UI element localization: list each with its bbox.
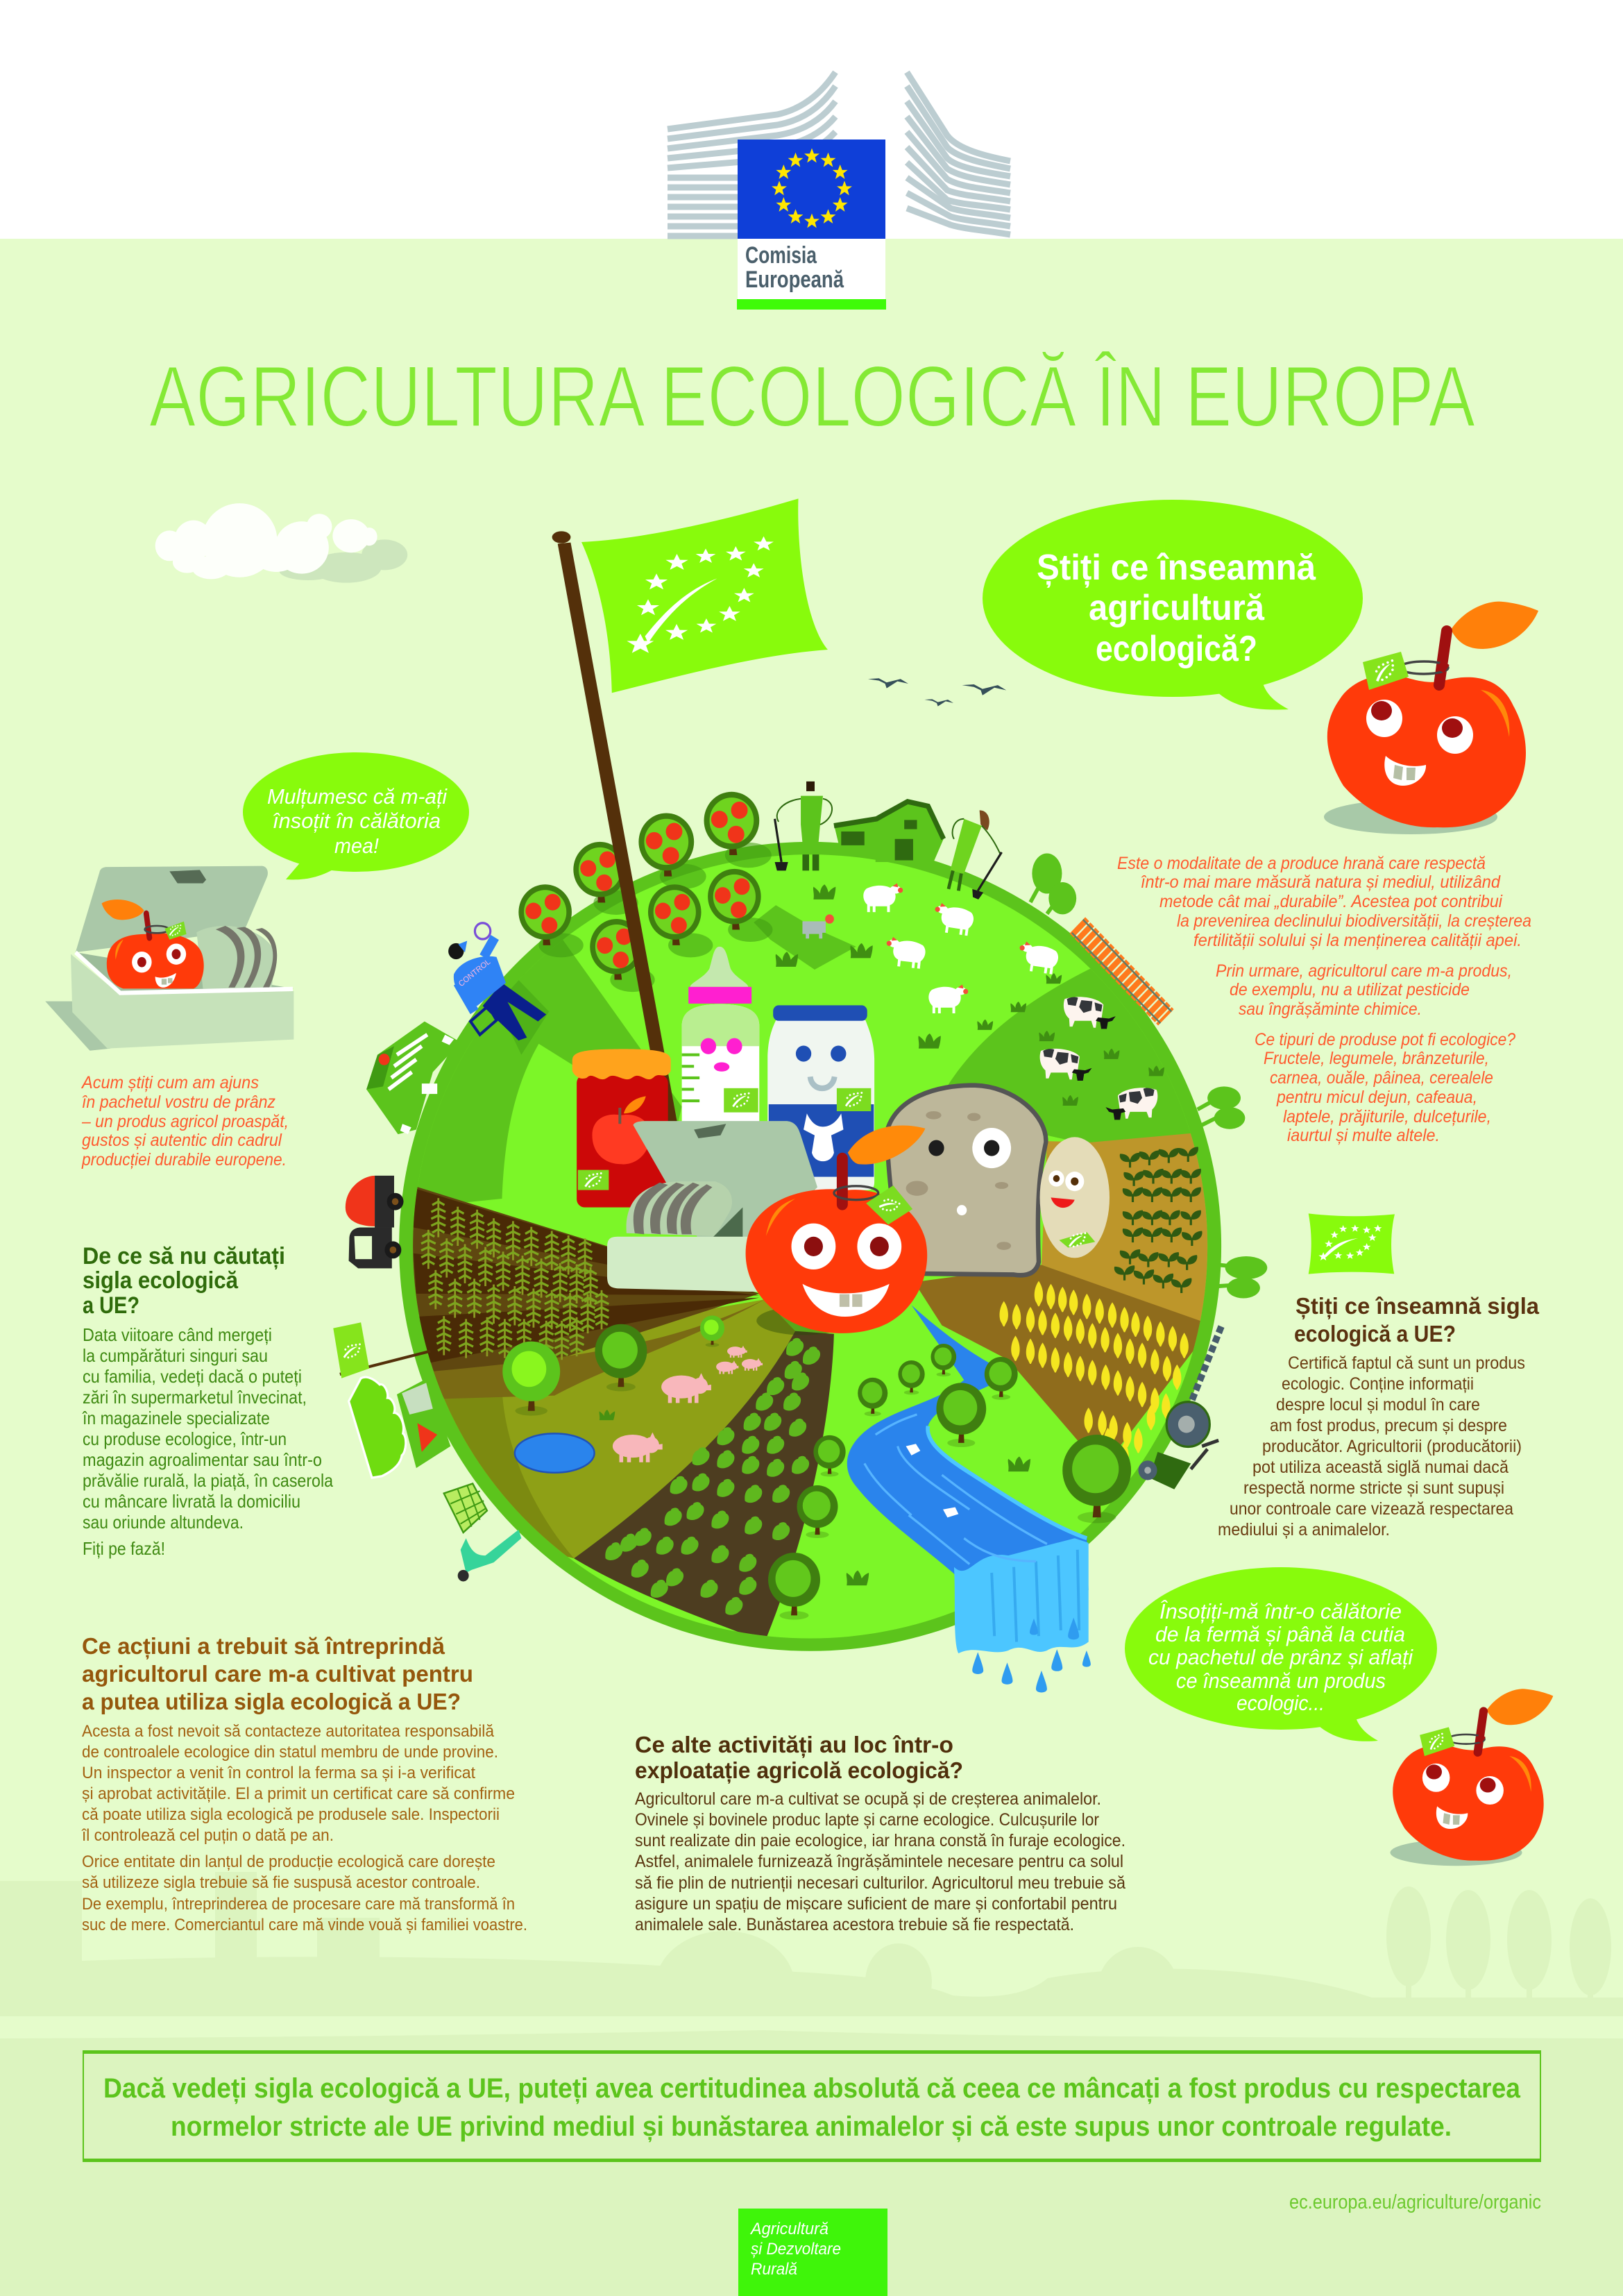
sheep flock bbox=[802, 884, 1060, 1013]
text block: what the logo means: mediului și a animalelor. bbox=[1218, 1520, 1390, 1539]
text block: look for the logo: prăvălie rurală, la piață, în caserola bbox=[83, 1470, 333, 1491]
illustration: left cloud and lunchbox bbox=[45, 503, 407, 1051]
text block: how you got to the lunchbox bbox=[80, 1073, 289, 1170]
footer green label: Agricultură bbox=[749, 2220, 829, 2238]
text block: what the farmer had to do: suc de mere. Comerciantul care mă vinde vouă și familiei voastre. bbox=[82, 1916, 527, 1934]
text block: what the farmer had to do: agricultorul care m-a cultivat pentru bbox=[82, 1661, 473, 1687]
field: olive pig pasture bbox=[422, 1299, 795, 1558]
text block: look for the logo: sigla ecologică bbox=[83, 1267, 239, 1294]
field: dark brown earth with lettuce bbox=[574, 1331, 834, 1642]
organic logo stars bbox=[627, 537, 774, 653]
text block: what the logo means: despre locul și modul în care bbox=[1276, 1395, 1480, 1415]
barn bbox=[834, 802, 944, 862]
text block: look for the logo: magazin agroalimentar sau într-o bbox=[83, 1449, 322, 1470]
inspector with magnifying glass bbox=[448, 923, 546, 1040]
icon: lunchbox with apple bbox=[45, 866, 294, 1051]
speech bubble: join me: de la fermă și până la cutia bbox=[1155, 1622, 1405, 1646]
field: wheat bbox=[919, 1265, 1200, 1445]
text block: other farm activities: sunt realizate din paie ecologice, iar hrana constă în furaje ecologice. bbox=[635, 1831, 1125, 1850]
bread slices bbox=[196, 926, 277, 988]
field: upper left meadow shadow bbox=[418, 1013, 538, 1202]
lunchbox with bread bbox=[607, 1121, 817, 1292]
text block: how you got to the lunchbox: gustos și autentic din cadrul bbox=[82, 1131, 282, 1150]
text block: look for the logo bbox=[82, 1243, 333, 1559]
flag pole bbox=[558, 543, 677, 1124]
text block: other farm activities: Agricultorul care m-a cultivat se ocupă și de creșterea animalelor. bbox=[635, 1789, 1101, 1809]
potato character bbox=[1040, 1137, 1110, 1258]
green logo bar bbox=[737, 299, 886, 310]
speech bubble: join me: ce înseamnă un produs bbox=[1176, 1669, 1386, 1693]
text block: what it means: laptele, prăjiturile, dulcețurile, bbox=[1283, 1107, 1491, 1126]
text block: what the farmer had to do: să utilizeze sigla trebuie să fie suspusă acestor controale. bbox=[82, 1873, 480, 1892]
text block: what it means: Fructele, legumele, brânzeturile, bbox=[1264, 1049, 1489, 1068]
water drops bbox=[972, 1618, 1091, 1692]
text block: what the farmer had to do: Un inspector a venit în control la ferma sa și i-a verificat bbox=[82, 1764, 475, 1782]
text block: what the logo means: ecologic. Conține informații bbox=[1282, 1374, 1474, 1394]
logo text bbox=[745, 242, 844, 293]
text block: what it means: într-o mai mare măsură natura și mediul, utilizând bbox=[1141, 872, 1501, 892]
text block: look for the logo: cu mâncare livrată la domiciliu bbox=[83, 1491, 300, 1512]
speech bubble: join me: Însoțiți-mă într-o călătorie bbox=[1159, 1599, 1402, 1623]
grass tufts bbox=[600, 884, 1164, 1585]
speech bubble: what is organic farming: Știți ce înseamnă bbox=[1037, 548, 1316, 588]
text block: look for the logo: zări în supermarketul învecinat, bbox=[83, 1387, 307, 1408]
text block: other farm activities: asigure un spațiu de mișcare suficient de mare și confortabil pentru bbox=[635, 1894, 1117, 1914]
flag cloth bbox=[581, 498, 828, 693]
text block: other farm activities: Ovinele și bovinele produc lapte și carne ecologice. Culcușurile lor bbox=[635, 1810, 1099, 1830]
truck with apples bbox=[346, 1176, 404, 1268]
text block: what the farmer had to do: de controalele ecologice din statul membru de unde provine. bbox=[82, 1743, 498, 1762]
text block: look for the logo: cu familia, vedeți dacă o puteți bbox=[83, 1366, 302, 1387]
milk bottle bbox=[682, 947, 759, 1124]
text block: what the farmer had to do: Acesta a fost nevoit să contacteze autoritatea responsabilă bbox=[82, 1722, 495, 1741]
text block: what it means: la prevenirea declinului biodiversității, la creșterea bbox=[1177, 911, 1531, 931]
text block: look for the logo: Fiți pe fază! bbox=[83, 1538, 165, 1559]
text block: what it means: Ce tipuri de produse pot fi ecologice? bbox=[1255, 1030, 1515, 1049]
text block: other farm activities: exploatație agricolă ecologică? bbox=[635, 1757, 963, 1784]
text block: what the farmer had to do: și aprobat activitățile. El a primit un certificat care să confirme bbox=[82, 1784, 515, 1803]
text block: how you got to the lunchbox: producției durabile europene. bbox=[81, 1150, 287, 1170]
featured products bbox=[572, 947, 1110, 1335]
flag with organic logo bbox=[552, 498, 828, 1124]
text block: what it means: pentru micul dejun, cafeaua, bbox=[1276, 1088, 1477, 1107]
speech bubble: thanks: Mulțumesc că m-ați bbox=[267, 784, 448, 809]
text block: what it means bbox=[1117, 854, 1531, 1145]
birds bbox=[868, 678, 1006, 707]
text block: what the logo means: am fost produs, precum și despre bbox=[1270, 1416, 1507, 1435]
text block: look for the logo: în magazinele specializate bbox=[82, 1408, 270, 1428]
text block: what it means: de exemplu, nu a utilizat pesticide bbox=[1230, 980, 1470, 999]
text block: look for the logo: Data viitoare când mergeți bbox=[83, 1324, 272, 1345]
logo text: Europeană bbox=[745, 267, 844, 293]
text block: what the logo means: ecologică a UE? bbox=[1294, 1321, 1456, 1347]
text block: what the logo means: Știți ce înseamnă sigla bbox=[1295, 1293, 1540, 1319]
text block: what it means: iaurtul și multe altele. bbox=[1287, 1126, 1440, 1145]
website link: ec.europa.eu/agriculture/organic bbox=[1289, 2191, 1541, 2213]
text block: how you got to the lunchbox: Acum știți cum am ajuns bbox=[80, 1073, 259, 1092]
apple character top right bbox=[1324, 602, 1538, 834]
text block: what it means: fertilității solului și la menținerea calității apei. bbox=[1193, 931, 1522, 950]
tractor and plough bbox=[1138, 1326, 1221, 1489]
text block: what the farmer had to do: Orice entitate din lanțul de producție ecologică care dorește bbox=[82, 1852, 495, 1871]
speech bubble: what is organic farming: agricultură bbox=[1089, 588, 1265, 628]
organic logo right bbox=[1309, 1213, 1395, 1274]
text block: how you got to the lunchbox: în pachetul vostru de prânz bbox=[82, 1092, 275, 1112]
farmer man bbox=[775, 782, 832, 870]
text block: other farm activities: Astfel, animalele furnizează îngrășămintele necesare pentru ca solul bbox=[635, 1852, 1123, 1871]
pond bbox=[515, 1433, 595, 1473]
illustration: organic farm globe bbox=[333, 782, 1267, 1692]
market building bbox=[366, 1022, 461, 1134]
text block: what it means: carnea, ouăle, pâinea, cerealele bbox=[1270, 1068, 1493, 1088]
speech bubble: thanks: însoțit în călătoria bbox=[273, 809, 441, 833]
globe fields bbox=[413, 854, 1207, 1638]
text block: what the farmer had to do: că poate utiliza sigla ecologică pe produsele sale. Inspectorii bbox=[82, 1805, 500, 1824]
text block: other farm activities bbox=[635, 1732, 1125, 1934]
text block: look for the logo: sau oriunde altundeva. bbox=[83, 1512, 244, 1533]
footer green label bbox=[738, 2209, 887, 2296]
speech bubble: thanks bbox=[243, 752, 469, 879]
text block: other farm activities: să fie plin de nutrienții necesari culturilor. Agricultorul meu trebuie să bbox=[635, 1873, 1125, 1893]
logo: European Commission bbox=[668, 72, 1010, 310]
white top band bbox=[0, 0, 1623, 239]
central apple character bbox=[746, 1125, 927, 1335]
trees on the rim bbox=[1030, 854, 1267, 1298]
apple character bottom right bbox=[1391, 1689, 1553, 1866]
text block: what the logo means: respectă norme stricte și sunt supuși bbox=[1243, 1478, 1504, 1498]
footer green label: Rurală bbox=[751, 2260, 797, 2279]
text block: what the logo means bbox=[1218, 1293, 1540, 1539]
text block: what it means: Este o modalitate de a produce hrană care respectă bbox=[1117, 854, 1486, 873]
footer green label: și Dezvoltare bbox=[751, 2240, 841, 2259]
lettuce rows bbox=[605, 1338, 820, 1615]
small flag and market stall bbox=[333, 1322, 450, 1478]
callout box bbox=[83, 2050, 1541, 2162]
text block: look for the logo: De ce să nu căutați bbox=[83, 1243, 285, 1269]
text block: what the farmer had to do: a putea utiliza sigla ecologică a UE? bbox=[82, 1689, 461, 1714]
speech bubble: thanks: mea! bbox=[334, 834, 379, 858]
speech bubble: what is organic farming bbox=[983, 500, 1363, 710]
shopper with cart bbox=[444, 1483, 521, 1581]
text block: other farm activities: animalele sale. Bunăstarea acestora trebuie să fie respectată. bbox=[635, 1915, 1074, 1934]
callout box: normelor stricte ale UE privind mediul și bunăstarea animalelor și că este supus unor controale regulate. bbox=[171, 2111, 1452, 2142]
text block: other farm activities: Ce alte activități au loc într-o bbox=[635, 1732, 953, 1758]
pole knob bbox=[552, 531, 570, 543]
white logo plate bbox=[738, 239, 885, 299]
milk jar bbox=[767, 1005, 874, 1190]
text block: what the farmer had to do bbox=[81, 1633, 527, 1934]
text block: what the logo means: producător. Agricultorii (producătorii) bbox=[1262, 1437, 1522, 1456]
corn plants bbox=[421, 1198, 609, 1360]
icon: cloud bbox=[155, 503, 407, 583]
speech bubble: join me: ecologic... bbox=[1237, 1691, 1325, 1715]
wheat plants bbox=[1000, 1281, 1189, 1467]
text block: what it means: Prin urmare, agricultorul care m-a produs, bbox=[1216, 961, 1512, 981]
EU flag panel bbox=[738, 140, 885, 239]
field: cow pasture bbox=[948, 969, 1191, 1142]
inspector with magnifying glass: CONTROL bbox=[457, 958, 492, 988]
cows bbox=[1040, 997, 1157, 1120]
round trees bbox=[502, 1315, 1131, 1620]
text block: what the farmer had to do: De exemplu, întreprinderea de procesare care mă transformă în bbox=[82, 1895, 515, 1914]
icon: Berlaymont building bbox=[668, 72, 1010, 236]
text block: how you got to the lunchbox: – un produs agricol proaspăt, bbox=[81, 1112, 289, 1131]
background landscape silhouette bbox=[0, 1872, 1623, 2296]
text block: what it means: metode cât mai „durabile”. Acestea pot contribui bbox=[1159, 892, 1503, 911]
text block: what the farmer had to do: îl controlează cel puțin o dată pe an. bbox=[81, 1826, 334, 1845]
sprout plants bbox=[1114, 1147, 1203, 1293]
speech bubble: join me bbox=[1125, 1567, 1437, 1741]
speech bubble: what is organic farming: ecologică? bbox=[1096, 629, 1257, 669]
globe base ring bbox=[399, 842, 1221, 1651]
pigs bbox=[613, 1346, 763, 1462]
text block: look for the logo: cu produse ecologice, într-un bbox=[83, 1428, 287, 1449]
speech bubble: join me: cu pachetul de prânz și aflați bbox=[1148, 1645, 1413, 1669]
field: sprouts bbox=[1042, 1131, 1216, 1328]
logo text: Comisia bbox=[745, 242, 817, 269]
river and waterfall bbox=[847, 1305, 1089, 1653]
text block: what it means: sau îngrășăminte chimice. bbox=[1239, 999, 1422, 1019]
text block: what the farmer had to do: Ce acțiuni a trebuit să întreprindă bbox=[82, 1633, 445, 1660]
farmer woman bbox=[949, 810, 1002, 900]
fence bbox=[1072, 920, 1171, 1023]
text block: look for the logo: la cumpărături singuri sau bbox=[83, 1345, 268, 1366]
jam jar bbox=[572, 1049, 671, 1207]
text block: what the logo means: pot utiliza această siglă numai dacă bbox=[1252, 1458, 1509, 1477]
text block: what the logo means: unor controale care vizează respectarea bbox=[1230, 1499, 1513, 1519]
text block: look for the logo: a UE? bbox=[83, 1292, 139, 1319]
apple orchard bbox=[518, 792, 772, 992]
callout box: Dacă vedeți sigla ecologică a UE, puteți avea certitudinea absolută că ceea ce mâncați a fost produs cu respectarea bbox=[103, 2073, 1521, 2104]
EU flag stars bbox=[772, 149, 852, 228]
bread character bbox=[887, 1086, 1046, 1275]
field: corn bbox=[394, 1181, 759, 1400]
text block: what the logo means: Certifică faptul că sunt un produs bbox=[1288, 1353, 1525, 1373]
